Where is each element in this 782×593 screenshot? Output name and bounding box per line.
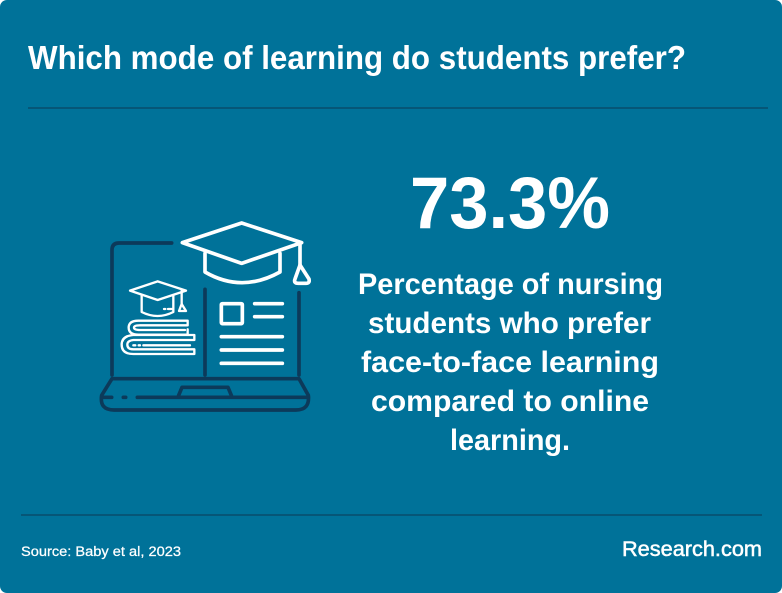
source: Source: Baby et al, 2023 <box>21 544 181 559</box>
icon: laptop with graduation cap <box>101 223 309 410</box>
description: learning. <box>450 424 570 457</box>
statistic: 73.3% <box>410 163 610 244</box>
description: face-to-face learning <box>361 346 659 379</box>
description <box>358 268 663 457</box>
icon: small cap and books <box>122 281 194 354</box>
icon: large graduation cap <box>182 223 309 283</box>
title: Which mode of learning do students prefer? <box>28 39 686 76</box>
document on screen <box>221 304 282 363</box>
logo: Research.com: Research.com <box>622 538 762 561</box>
laptop screen and base <box>101 243 309 410</box>
description: compared to online <box>371 385 649 418</box>
description: students who prefer <box>368 307 651 340</box>
description: Percentage of nursing <box>358 268 663 301</box>
